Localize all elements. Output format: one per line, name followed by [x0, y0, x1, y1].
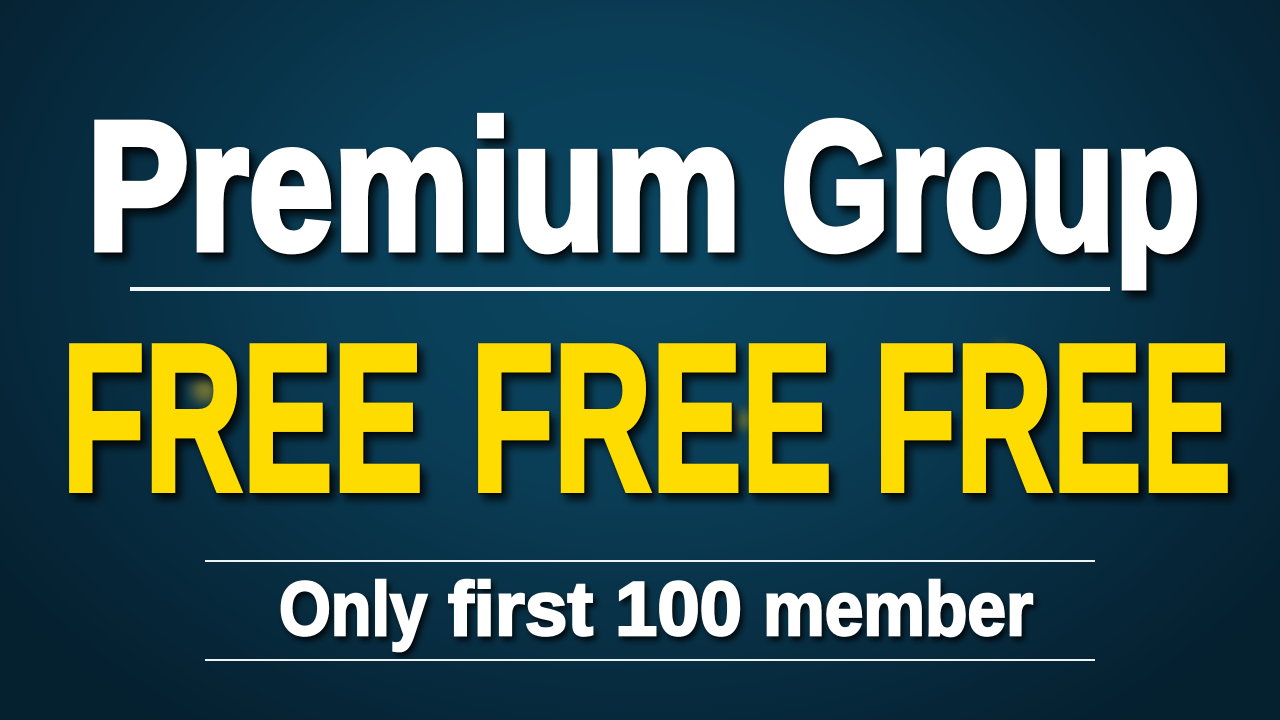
upper rule of subtitle: [205, 560, 1095, 562]
subtitle: Only first 100 member: [279, 567, 1033, 652]
background glow lights: [192, 344, 1006, 429]
subtitle: Only first 100 member: first: [448, 567, 593, 652]
lower rule of subtitle: [205, 659, 1095, 661]
subtitle: Only first 100 member: member: [763, 567, 1033, 652]
headline: FREE FREE FREE: FREE: [471, 302, 832, 535]
title: Premium Group: Premium: [87, 83, 741, 288]
headline: FREE FREE FREE: FREE: [62, 302, 423, 535]
divider under title: [130, 287, 1110, 291]
subtitle: Only first 100 member: Only: [279, 567, 427, 652]
subtitle: Only first 100 member: 100: [615, 567, 742, 652]
headline: FREE FREE FREE: [62, 302, 1231, 535]
